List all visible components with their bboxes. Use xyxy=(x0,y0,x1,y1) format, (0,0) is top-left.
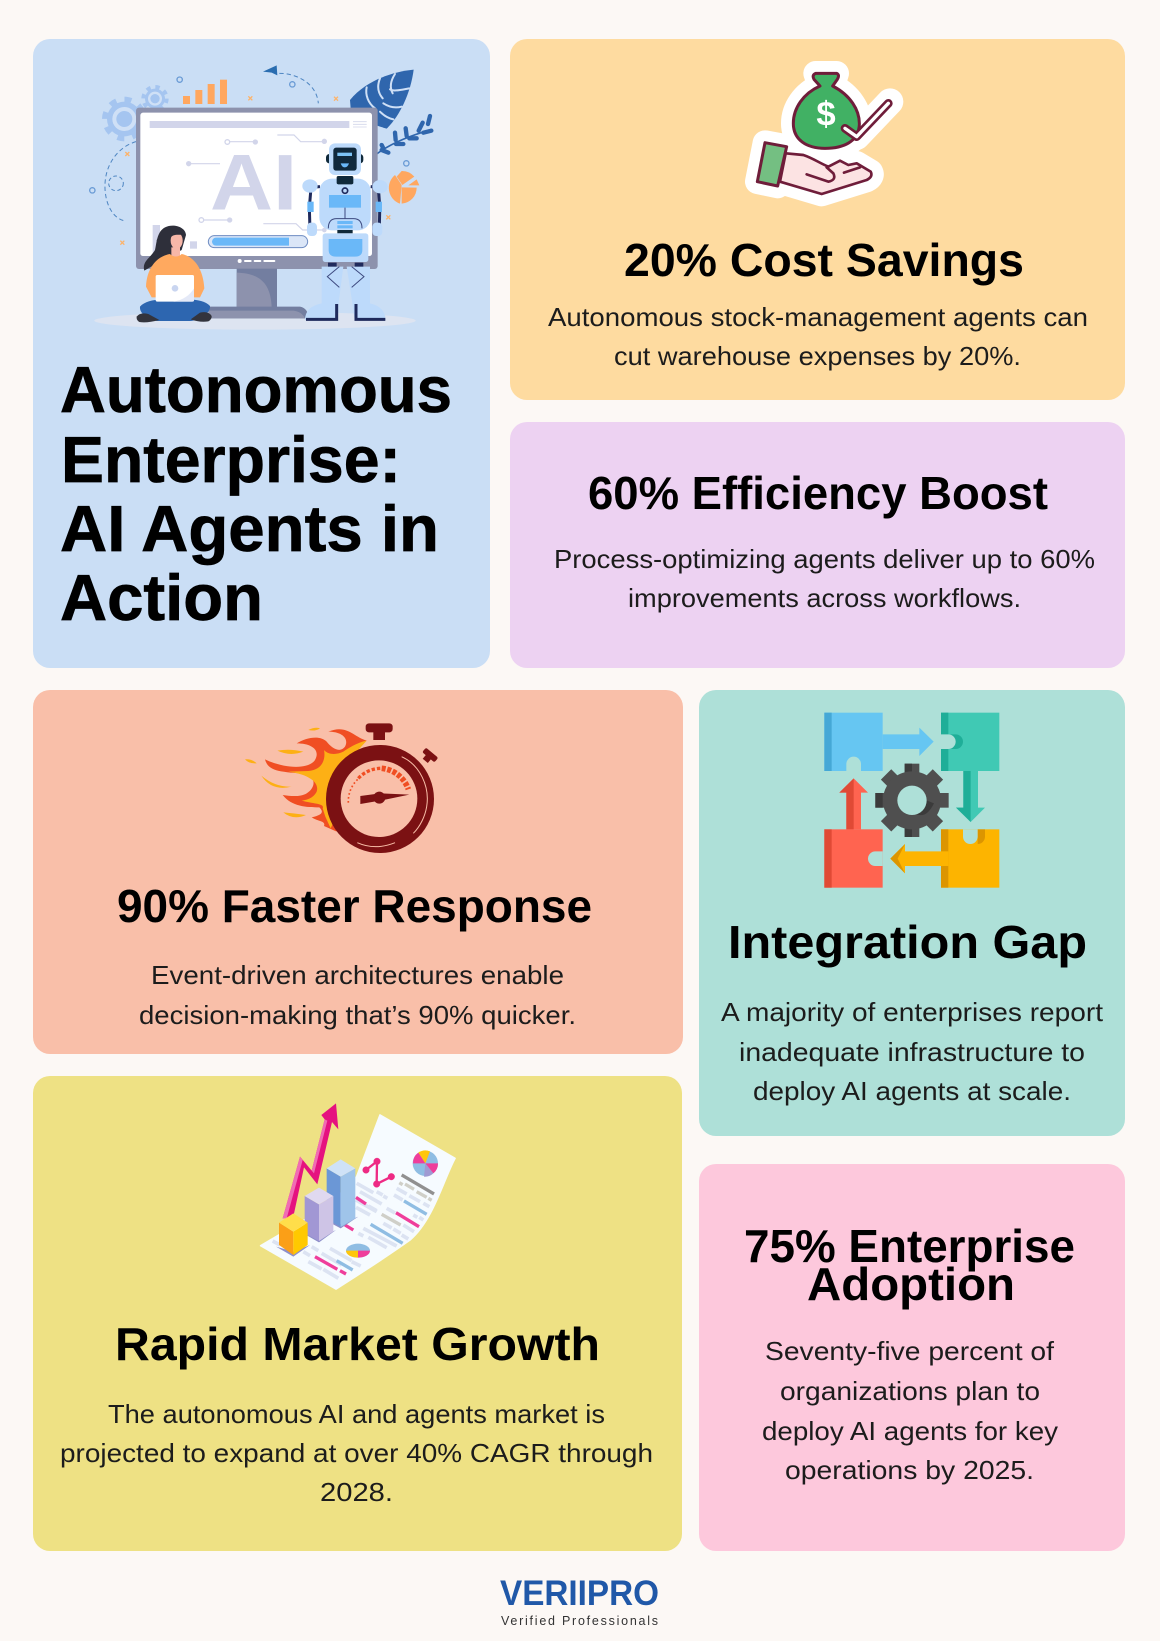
body text: Event-driven architectures enable xyxy=(151,960,564,990)
heading: 60% Efficiency Boost xyxy=(588,467,1048,519)
panel: title and AI illustration xyxy=(33,39,490,668)
logo: Veriipro: Verified Professionals xyxy=(501,1614,658,1628)
icon: report with rising bar chart xyxy=(261,1103,455,1289)
illustration: person and robot at AI monitor xyxy=(90,65,432,330)
bars xyxy=(183,80,227,104)
heading: 90% Faster Response xyxy=(117,880,592,932)
body text xyxy=(762,1336,1058,1485)
leaf xyxy=(350,70,414,129)
body text: Process-optimizing agents deliver up to 60% xyxy=(554,544,1095,574)
title: AI Agents in xyxy=(60,492,439,565)
body text: improvements across workflows. xyxy=(628,583,1021,613)
blue piece xyxy=(824,713,934,771)
icon: money bag on hand with check xyxy=(757,73,890,194)
red piece xyxy=(824,778,883,888)
body text xyxy=(554,544,1095,613)
body text: The autonomous AI and agents market is xyxy=(108,1399,605,1429)
heading: Adoption xyxy=(807,1258,1015,1310)
icon: puzzle pieces and gear xyxy=(824,713,999,888)
panel: rapid market growth xyxy=(33,1076,682,1551)
3D bars xyxy=(325,1217,358,1228)
network graph xyxy=(363,1158,395,1187)
green piece xyxy=(941,713,999,822)
body text: Autonomous stock-management agents can xyxy=(548,302,1088,332)
body text xyxy=(721,997,1104,1106)
body text: inadequate infrastructure to xyxy=(739,1037,1085,1067)
heading: Integration Gap xyxy=(728,916,1087,968)
body text: decision-making that’s 90% quicker. xyxy=(139,1000,576,1030)
yellow piece xyxy=(890,829,999,888)
heading: 75% Enterprise xyxy=(744,1220,1075,1272)
body text xyxy=(548,302,1088,371)
body text: 2028. xyxy=(320,1477,393,1507)
panel: 75% enterprise adoption xyxy=(699,1164,1125,1551)
gears xyxy=(106,87,167,138)
body text: operations by 2025. xyxy=(785,1455,1034,1485)
icon: flaming stopwatch xyxy=(245,723,438,853)
heading: Rapid Market Growth xyxy=(115,1318,600,1370)
body text: Seventy-five percent of xyxy=(765,1336,1055,1366)
title: Enterprise: xyxy=(61,423,401,496)
body text xyxy=(139,960,576,1030)
body text: deploy AI agents at scale. xyxy=(753,1076,1071,1106)
body text xyxy=(60,1399,653,1507)
body text: projected to expand at over 40% CAGR through xyxy=(60,1438,653,1468)
monitor xyxy=(136,108,378,269)
pie charts xyxy=(413,1150,438,1177)
panel: 90% faster response xyxy=(33,690,683,1054)
body text: A majority of enterprises report xyxy=(721,997,1104,1027)
AI lettering: AI xyxy=(210,138,297,226)
robot xyxy=(305,267,343,320)
title: Action xyxy=(60,561,263,634)
gear xyxy=(875,764,949,837)
body text: deploy AI agents for key xyxy=(762,1416,1058,1446)
woman xyxy=(144,226,186,271)
stand xyxy=(237,269,277,307)
heading xyxy=(744,1220,1075,1310)
pie chart xyxy=(397,171,414,185)
logo: Veriipro xyxy=(500,1574,659,1628)
panel: 20% cost savings xyxy=(510,39,1125,400)
title: Autonomous xyxy=(60,353,452,426)
body text: cut warehouse expenses by 20%. xyxy=(614,341,1021,371)
body text: organizations plan to xyxy=(780,1376,1040,1406)
sprig xyxy=(377,116,432,154)
panel: 60% efficiency boost xyxy=(510,422,1125,668)
report lines xyxy=(273,1183,429,1278)
icon: money bag on hand with check: $ xyxy=(816,96,836,134)
heading: 20% Cost Savings xyxy=(624,234,1024,286)
panel: integration gap xyxy=(699,690,1125,1136)
rising arrow xyxy=(283,1103,338,1218)
logo: Veriipro: VERIIPRO xyxy=(500,1574,659,1613)
paper plane xyxy=(263,65,277,75)
title xyxy=(60,353,452,634)
